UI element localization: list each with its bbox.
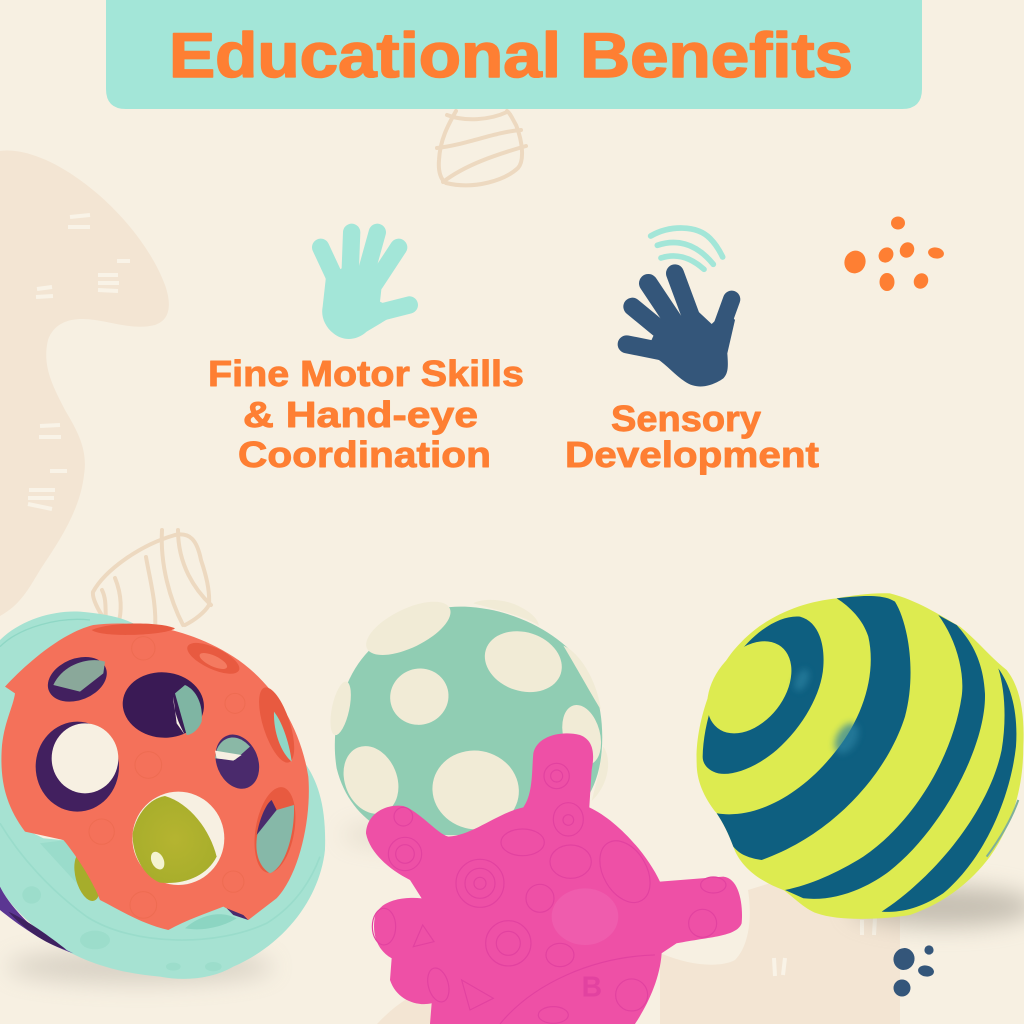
heading: sensory development <box>565 398 819 475</box>
heading: fine motor skills: Fine Motor Skills <box>208 353 524 394</box>
holes <box>92 624 175 635</box>
decorative blob: bottom right <box>377 880 900 1024</box>
teal flaps <box>185 914 237 929</box>
title: Educational Benefits <box>169 21 853 91</box>
header banner <box>106 0 922 109</box>
toy: pink textured ball <box>366 733 742 1024</box>
heading: sensory development: Development <box>565 434 819 475</box>
icon: navy dots <box>890 945 935 996</box>
teal shell <box>0 611 325 979</box>
toy: green ball with cream spots <box>327 591 608 848</box>
heading: fine motor skills: & Hand-eye <box>243 394 478 435</box>
purple base <box>0 887 73 953</box>
decorative sketch: behind coral ball <box>93 530 211 630</box>
heading: sensory development: Sensory <box>611 398 761 439</box>
embossed circles <box>89 637 245 918</box>
lime centre <box>690 625 809 750</box>
decorative blob: left <box>0 150 169 616</box>
icon: navy hand with waves <box>627 228 735 386</box>
toy: striped ball <box>690 593 1024 927</box>
toy: pink textured ball: B <box>582 972 602 1004</box>
coral cage <box>1 623 309 930</box>
heading: fine motor skills <box>208 353 524 475</box>
stripes <box>703 596 1016 912</box>
decorative sketch: top <box>437 111 526 185</box>
icon: orange dots <box>841 216 945 291</box>
cream spots <box>327 591 608 836</box>
heading: fine motor skills: Coordination <box>238 434 491 475</box>
icon: teal hand <box>321 232 409 339</box>
toy: coral and teal ball <box>0 611 325 983</box>
embossed patterns <box>372 763 726 1024</box>
